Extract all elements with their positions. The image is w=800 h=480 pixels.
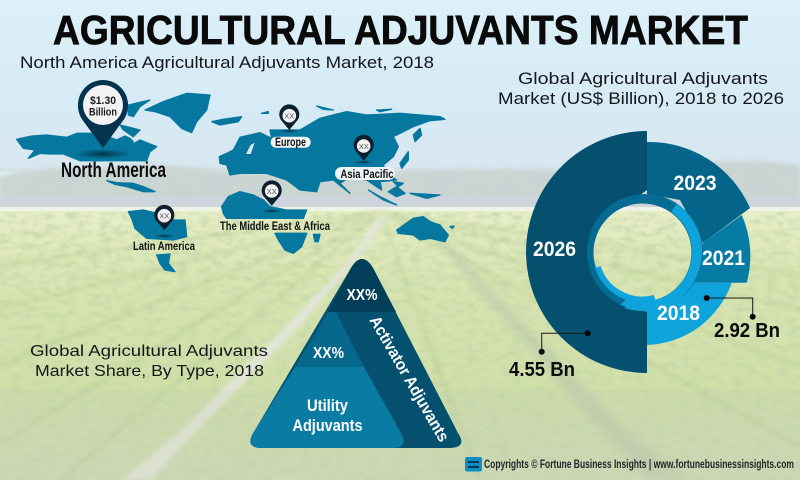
icon: fortune business insights logo xyxy=(465,457,482,472)
heading: donut chart: Global Agricultural Adjuvants xyxy=(518,70,768,88)
pin: Latin America: XX xyxy=(159,212,169,220)
copyright footer xyxy=(465,457,794,472)
inner ring crescent xyxy=(598,267,655,300)
pin: north america $1.30 Billion: $1.30 xyxy=(90,95,116,107)
label utility adjuvants: Adjuvants xyxy=(292,417,362,435)
label: Europe: Europe xyxy=(275,135,306,149)
title: AGRICULTURAL ADJUVANTS MARKET xyxy=(53,7,748,53)
heading: pyramid xyxy=(30,343,268,380)
activator adjuvants band xyxy=(250,259,461,448)
pin: Asia Pacific: XX xyxy=(359,142,369,151)
pin: Europe xyxy=(279,104,299,133)
middle XX% section xyxy=(295,312,364,367)
pin: Asia Pacific xyxy=(354,135,374,164)
pin: Middle East and Africa: XX xyxy=(267,187,277,196)
label: The Middle East & Africa: The Middle East & Africa xyxy=(220,219,330,233)
callout: 2.92 Bn: 2.92 Bn xyxy=(714,319,780,342)
label activator adjuvants: Activator Adjuvants xyxy=(366,313,452,445)
label: Latin America: Latin America xyxy=(133,239,195,253)
callout: 4.55 Bn xyxy=(509,330,591,381)
heading: donut chart: Market (US$ Billion), 2018 to 2026 xyxy=(498,90,784,108)
callout: 4.55 Bn: 4.55 Bn xyxy=(509,358,575,381)
heading: pyramid: Global Agricultural Adjuvants xyxy=(30,343,268,360)
label XX% middle: XX% xyxy=(313,345,344,362)
pin: Europe: XX xyxy=(284,112,294,120)
label 2021: 2021 xyxy=(702,247,745,270)
inner ring xyxy=(587,194,703,310)
label XX% top: XX% xyxy=(346,287,378,304)
segment 2021 xyxy=(690,215,750,283)
segment 2023 xyxy=(647,142,750,243)
world map xyxy=(17,80,454,272)
callout: 2.92 Bn xyxy=(704,295,780,342)
label utility adjuvants: Utility xyxy=(307,397,349,415)
heading: donut chart xyxy=(498,70,784,108)
label 2026: 2026 xyxy=(533,238,576,261)
pin: Middle East and Africa xyxy=(262,180,282,213)
utility adjuvants section xyxy=(250,367,404,448)
label: North America: North America xyxy=(61,159,166,182)
segment 2018 xyxy=(647,283,732,345)
heading: pyramid: Market Share, By Type, 2018 xyxy=(35,363,264,380)
segment 2026 xyxy=(526,131,647,373)
pin: north america $1.30 Billion xyxy=(75,80,131,159)
top cap xyxy=(328,259,396,312)
pin: north america $1.30 Billion: Billion xyxy=(89,106,117,118)
label 2023: 2023 xyxy=(674,172,716,195)
inner ring highlight xyxy=(626,208,697,306)
pyramid chart xyxy=(250,259,461,448)
label: Asia Pacific: Asia Pacific xyxy=(340,167,394,181)
label utility adjuvants xyxy=(292,397,362,435)
heading: north america map: North America Agricultural Adjuvants Market, 2018 xyxy=(20,54,434,72)
label 2018: 2018 xyxy=(657,302,700,325)
donut chart xyxy=(526,131,750,373)
pin: Latin America xyxy=(154,205,174,238)
